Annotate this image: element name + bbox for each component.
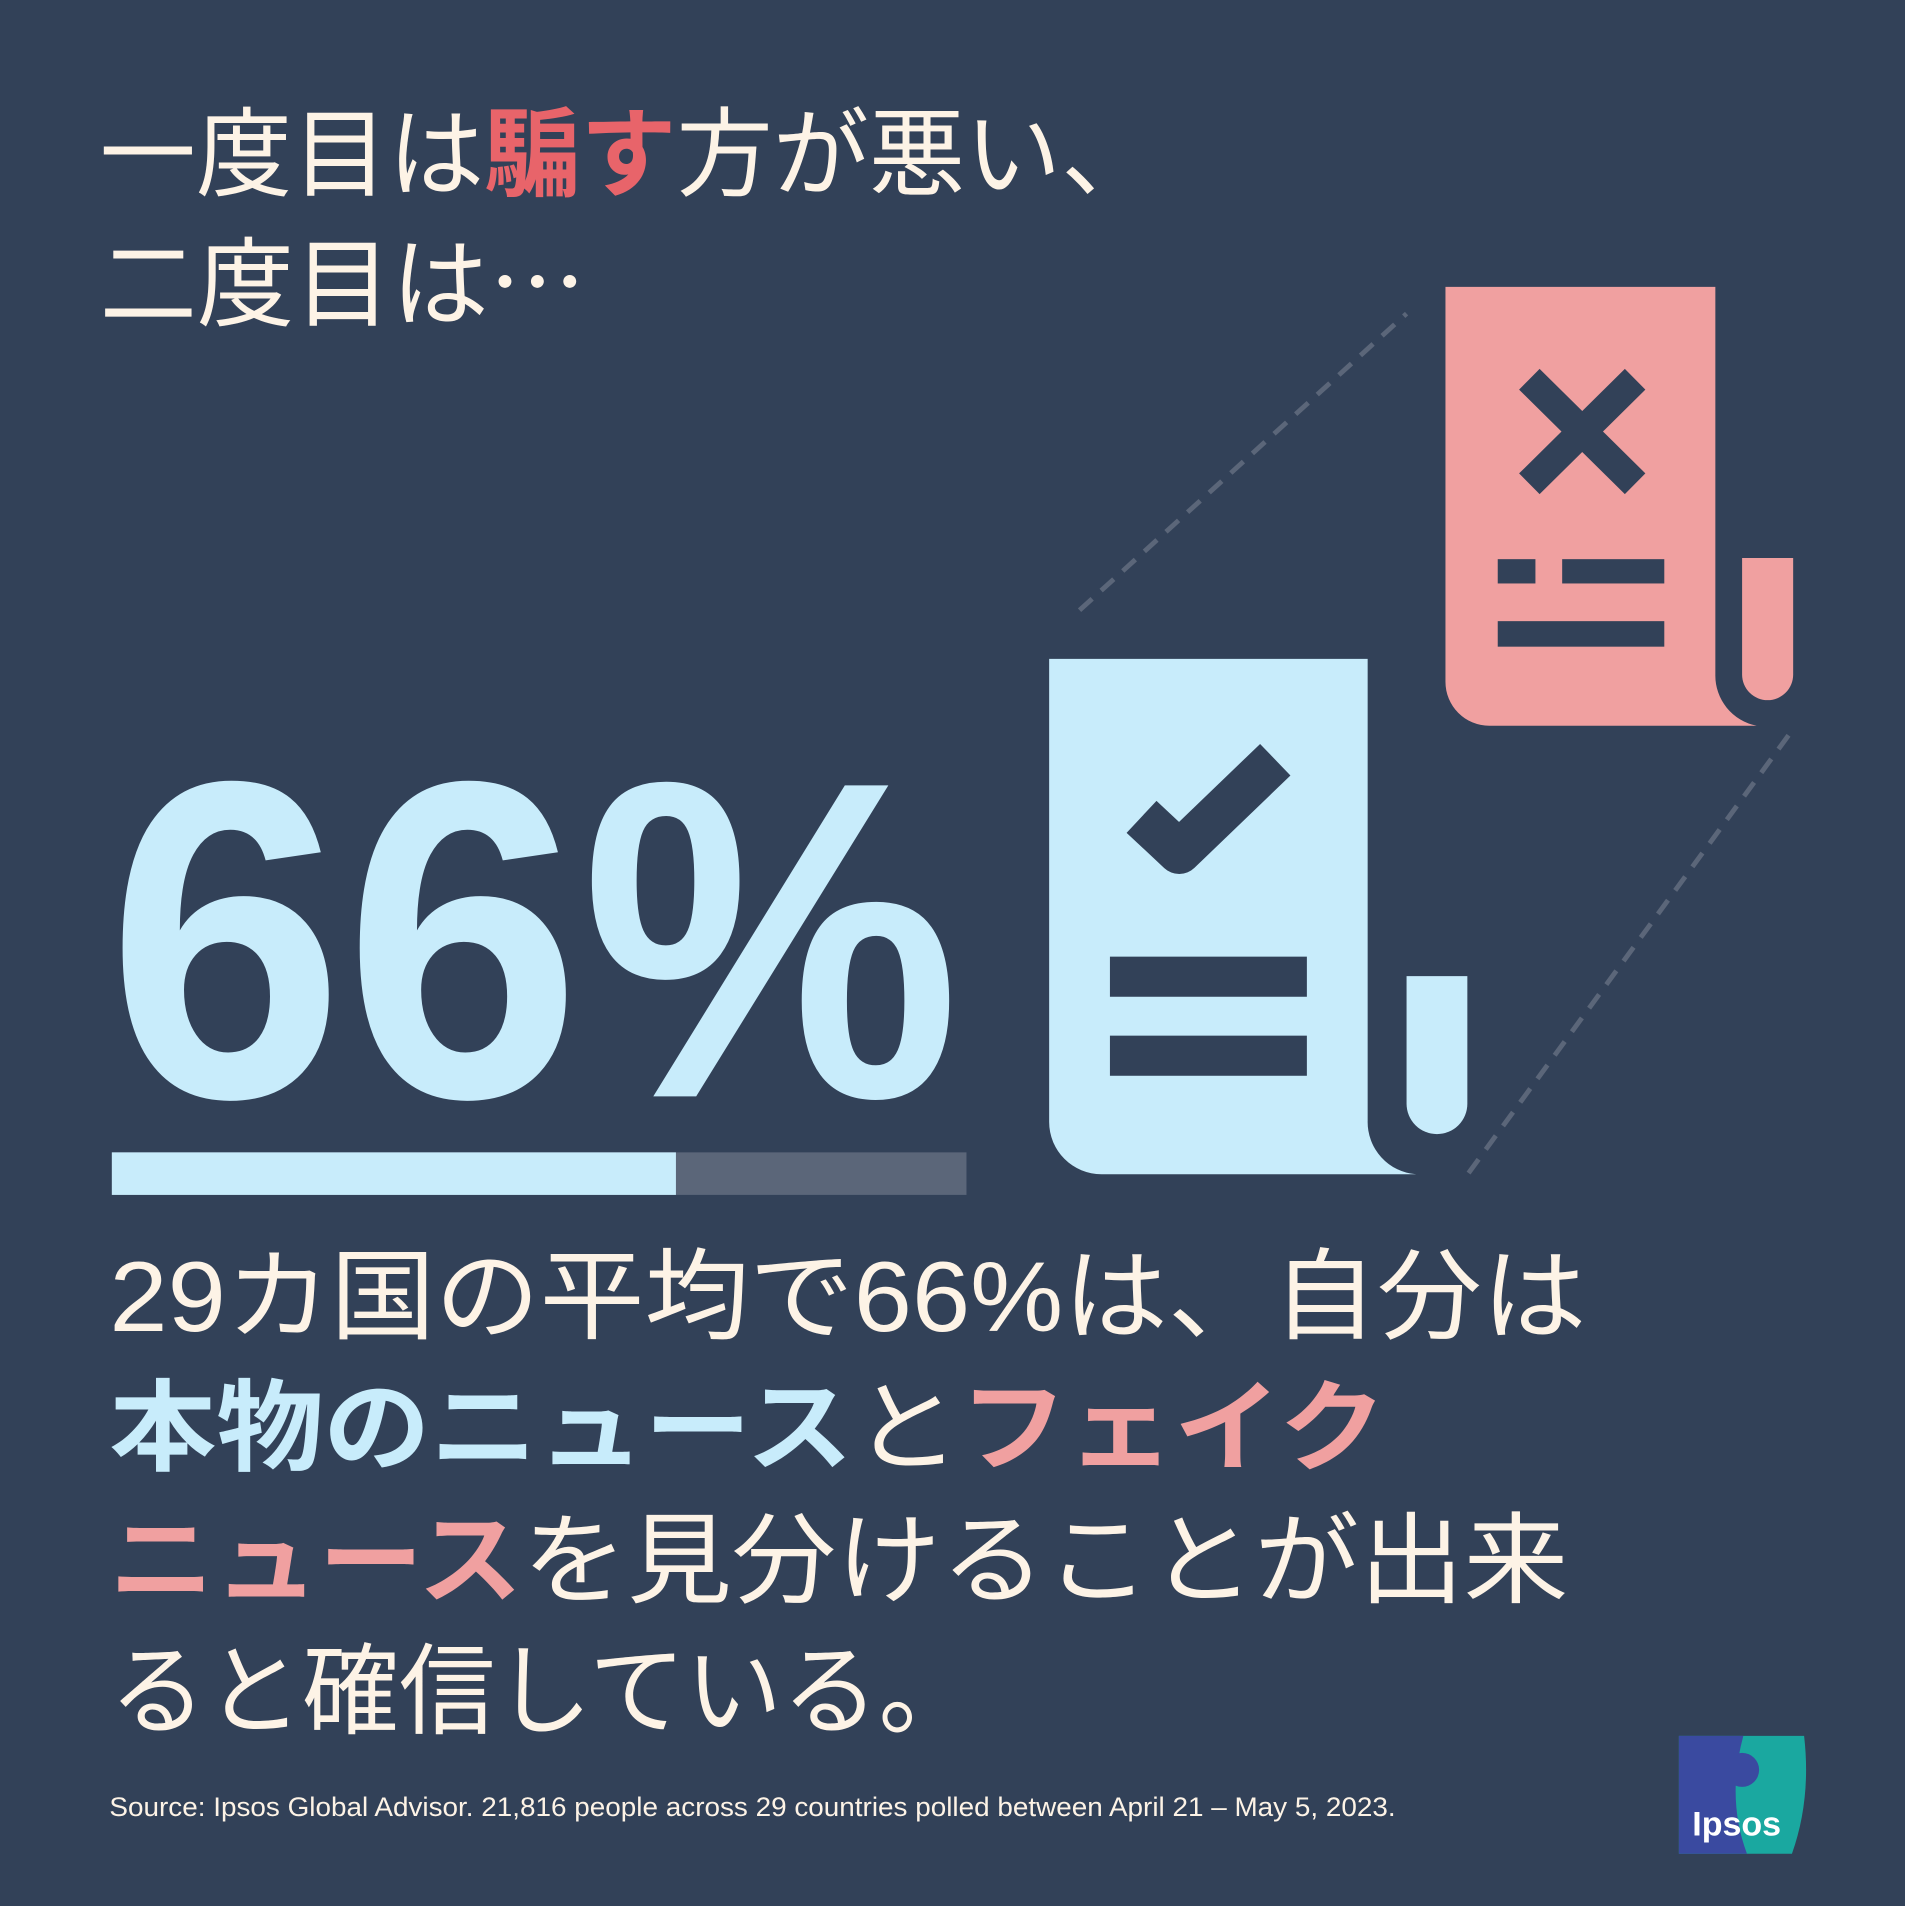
logo: Ipsos — [1679, 1736, 1806, 1854]
dashed connector lines — [1080, 314, 1796, 1173]
body text: 本物のニュース とフェイク — [109, 1373, 1386, 1484]
body text: ニュースを見分けることが出来 — [109, 1506, 1568, 1617]
logo: Ipsos: Ipsos — [1692, 1805, 1781, 1843]
big number 66%: 66% — [107, 687, 960, 1192]
title: 二度目は⋯ — [100, 206, 586, 347]
title: 一度目は騙す方が悪い、 — [100, 100, 1157, 209]
source note: Source: Ipsos Global Advisor. 21,816 people across 29 countries polled between April 21 – May 5, 2023. — [109, 1792, 1396, 1822]
progress bar — [112, 1152, 966, 1195]
body text: 29カ国の平均で66%は、自分は — [109, 1242, 1586, 1353]
body text: ると確信している。 — [109, 1637, 975, 1748]
body text — [109, 1242, 1586, 1748]
title — [100, 100, 1157, 347]
icon: real news document — [1049, 659, 1467, 1174]
icon: fake news document — [1445, 287, 1793, 726]
